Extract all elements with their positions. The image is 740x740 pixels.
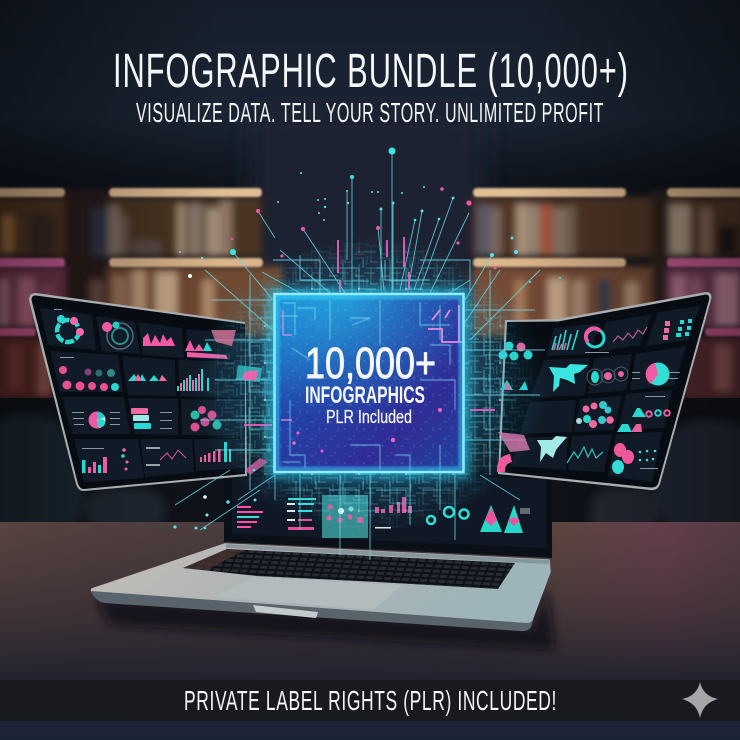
right tablet [498,292,711,490]
panel count text: INFOGRAPHICS [305,382,425,409]
front notch [253,605,318,618]
floating card [322,495,368,538]
network spikes [175,151,545,560]
pie [646,362,670,386]
triangle charts [480,505,523,533]
table [0,522,740,740]
donut chart [102,322,133,349]
hexagon cluster [576,401,614,428]
dashboard panels [510,306,700,482]
laptop [91,470,555,650]
network nodes [173,148,561,530]
line chart [567,447,603,463]
lower bar chart [82,457,107,473]
dot list [639,450,656,461]
lower room shadow [0,398,740,528]
books [2,215,14,253]
laptop shadow [95,590,555,650]
icon: sparkle star [682,682,718,718]
chairs [0,415,740,545]
dashboard panels [40,308,245,482]
dot matrix [663,319,692,340]
line chart [146,448,186,465]
pink streaks [244,237,495,425]
overlay side panel [498,342,532,390]
stacked blocks [131,408,151,429]
pie chart [88,411,106,428]
footer banner [0,680,740,721]
upper shelf back panels [0,197,65,257]
ovals [612,443,634,474]
tiny legends [585,352,680,469]
keyboard [183,549,515,589]
laptop base [92,544,550,624]
laptop screen [224,470,552,558]
left tablet [29,293,247,491]
panel count text [305,339,436,427]
dot list [121,448,128,470]
mountain chart [128,374,167,381]
pink triangles [185,340,228,359]
gear circles [587,367,628,385]
lower right bars [200,442,231,462]
bar chart [177,369,209,391]
background: blurred library [0,0,740,545]
triangle and ring group [617,408,670,432]
bubble cluster [190,406,222,432]
data network glow [190,240,550,530]
circuit network [173,148,561,560]
donut [586,328,604,347]
panel circuit lines [280,300,455,470]
small map [537,436,567,462]
line graph [613,327,647,342]
trackpad [215,577,402,610]
panel count text: PLR Included [326,407,412,427]
floating pink blocks [211,330,530,475]
ring chart [57,315,84,342]
panel inner glow [277,297,461,469]
tiny legends [54,309,172,449]
panel pink accents [281,305,462,420]
glowing central panel [268,288,470,478]
bar cluster [552,330,578,350]
shelf lights [0,188,740,336]
wave chart [143,333,175,346]
panel count text: 10,000+ [305,339,436,388]
process circles [59,366,119,391]
world map [549,364,588,392]
